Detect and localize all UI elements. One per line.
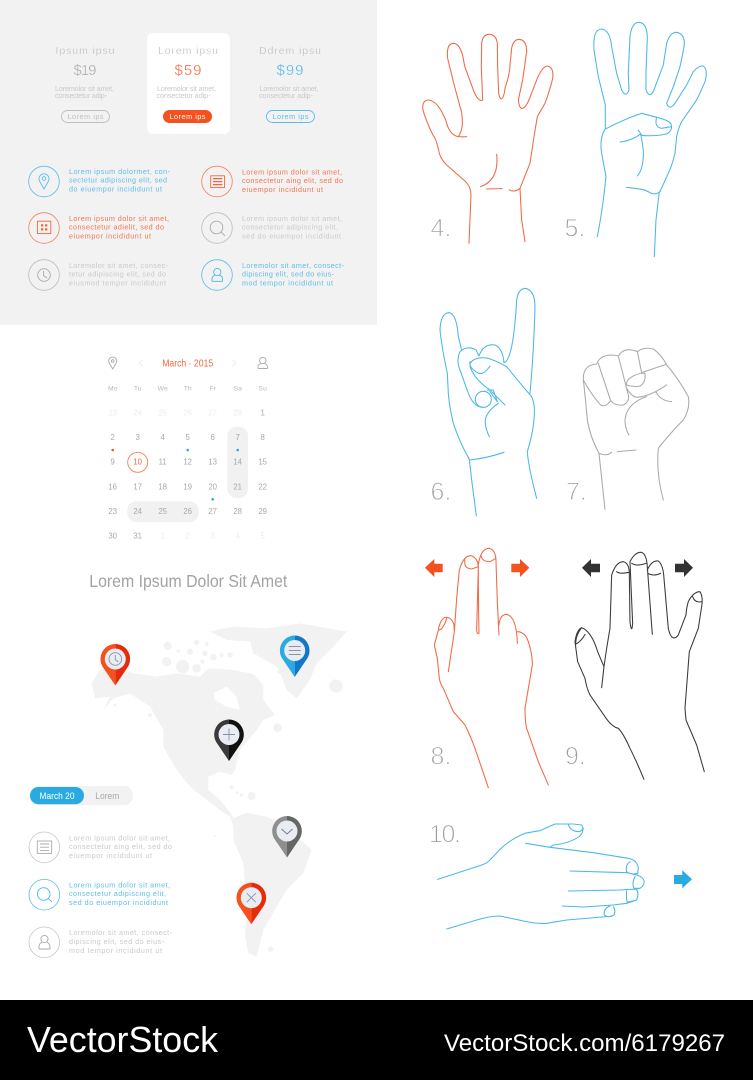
hand 5: four fingers <box>594 22 706 257</box>
list item: user: mod tempor incididunt ut <box>69 946 162 955</box>
calendar days: 4 <box>161 433 166 442</box>
calendar days: 12 <box>183 458 192 467</box>
calendar header <box>109 357 268 370</box>
hand 6: rock sign <box>440 288 537 516</box>
calendar weekday labels: Su <box>259 386 267 392</box>
calendar days: 19 <box>183 482 192 491</box>
calendar days: 30 <box>108 532 118 541</box>
hand 8: two fingers spread <box>434 548 548 788</box>
feature: list: consectetur aing elit, sed do <box>242 176 343 185</box>
list item: search: sed do eiuempor incididunt <box>69 898 168 907</box>
calendar days: 17 <box>133 482 142 491</box>
calendar days: 5 <box>186 433 191 442</box>
arrow: blue right <box>674 870 692 888</box>
number 7: 7. <box>566 478 587 506</box>
feature: clock: tetur adipiscing elit, sed do <box>69 270 166 279</box>
map heading: Lorem Ipsum Dolor Sit Amet <box>89 571 287 591</box>
list item: document: Lorem ipsum dolor sit amet, <box>69 834 170 842</box>
feature: grid: eiuempor incididunt ut <box>69 231 151 240</box>
pricing plan: Lorem ipsu (highlighted card): Lorem ips <box>170 112 206 121</box>
feature: list: Lorem ipsum dolor sit amet, <box>242 168 342 176</box>
pricing plan: Ipsum ipsu: Loremolor sit amet, <box>55 84 114 93</box>
feature: user: dipiscing elit, sed do eius- <box>242 270 335 279</box>
pricing plan: Ddrem ipsu: consectetur adip- <box>259 91 314 100</box>
number 4: 4. <box>430 215 451 243</box>
calendar days: 24 <box>133 507 143 516</box>
calendar days: 25 <box>158 408 168 417</box>
feature: location: sectetur adipiscing elit, sed <box>69 176 167 185</box>
calendar days: 26 <box>183 507 192 516</box>
feature: search: Lorem ipsum dolor sit amet, <box>242 214 342 223</box>
calendar days: 16 <box>108 482 117 491</box>
feature: user <box>202 260 345 290</box>
list item: document: eiuempor incididunt ut <box>69 851 152 860</box>
calendar days: 6 <box>211 433 215 442</box>
number 10: 10. <box>429 821 461 849</box>
pricing plan: Ipsum ipsu: $19 <box>74 62 96 79</box>
footer URL: VectorStock.com/6179267 <box>444 1030 725 1057</box>
map pin: chevron <box>272 816 302 858</box>
list item: document: consectetur aing elit, sed do <box>69 842 172 851</box>
hand 4: open palm <box>423 34 553 243</box>
calendar days: 18 <box>158 482 167 491</box>
calendar days: 22 <box>258 482 267 491</box>
calendar days: 20 <box>208 482 218 491</box>
map of the Americas <box>92 623 347 957</box>
calendar days: 27 <box>208 408 217 417</box>
feature: location <box>29 166 171 197</box>
pricing plan: Lorem ipsu (highlighted card): consectetur adip- <box>156 91 211 100</box>
number 5: 5. <box>564 215 585 243</box>
calendar days: 24 <box>133 408 143 417</box>
calendar days: 2 <box>186 532 190 541</box>
map pin: plus <box>214 720 244 761</box>
calendar days: 27 <box>208 507 217 516</box>
calendar days: 29 <box>258 507 267 516</box>
calendar weekday labels: Th <box>184 386 192 392</box>
map pin: close <box>236 883 266 924</box>
hand 9: four fingers spread <box>575 552 704 779</box>
feature: search <box>202 213 342 243</box>
hand 10: sideways swipe <box>438 824 644 929</box>
calendar days: 5 <box>261 532 266 541</box>
feature: grid <box>29 213 169 243</box>
pricing plan: Lorem ipsu (highlighted card): Loremolor sit amet, <box>157 84 216 93</box>
feature: list: eiuempor incididunt ut <box>242 185 323 194</box>
feature: user: Loremolor sit amet, consect- <box>242 261 345 270</box>
calendar days: 21 <box>233 482 242 491</box>
date toggle: March 20 <box>40 791 74 802</box>
calendar days: 14 <box>233 458 243 467</box>
calendar weekday labels: Sa <box>234 386 242 392</box>
list item: user <box>29 927 173 958</box>
pricing plan: Ipsum ipsu <box>55 45 115 122</box>
list item: search <box>29 879 170 910</box>
calendar days: 8 <box>261 433 265 442</box>
feature: clock <box>29 260 169 290</box>
pricing plan: Ipsum ipsu: Ipsum ipsu <box>56 45 115 57</box>
footer logo: VectorStock <box>27 1019 219 1060</box>
number 6: 6. <box>430 478 451 506</box>
calendar days <box>108 408 268 541</box>
map pin: clock <box>100 644 130 686</box>
calendar days: 26 <box>183 408 192 417</box>
arrow: orange right <box>511 559 529 577</box>
calendar days: 28 <box>233 408 242 417</box>
panel: pricing and features <box>0 0 377 325</box>
pricing plan: Lorem ipsu (highlighted card): Lorem ipsu <box>158 45 218 57</box>
arrow: dark right <box>675 559 693 577</box>
calendar weekday labels: We <box>158 386 168 392</box>
arrow: dark left <box>582 559 600 577</box>
calendar days: 10 <box>133 458 143 467</box>
list item: document <box>29 832 172 863</box>
map pin: menu <box>280 636 310 677</box>
list item: search: consectetur adipiscing elit, <box>69 889 166 898</box>
calendar days: 23 <box>108 507 117 516</box>
feature: grid: consectetur adielit, sed do <box>69 223 164 232</box>
calendar days: 31 <box>133 532 142 541</box>
calendar days: 7 <box>236 433 240 442</box>
list item: search: Lorem ipsum dolor sit amet, <box>69 880 170 890</box>
calendar days: 1 <box>161 532 165 541</box>
calendar days: 2 <box>111 433 115 442</box>
calendar days: 3 <box>136 433 140 442</box>
calendar weekday labels <box>108 386 267 392</box>
feature: clock: eiusmod tempor incididunt <box>69 278 166 287</box>
footer band <box>0 1000 753 1080</box>
calendar weekday labels: Mo <box>108 386 118 392</box>
feature: search: consectetur adipiscing elit, <box>242 223 338 232</box>
feature: list <box>202 166 343 197</box>
arrow: orange left <box>425 559 443 577</box>
feature: search: sed do eiuempor incididunt <box>242 231 341 240</box>
pricing plan: Ddrem ipsu <box>259 45 321 122</box>
pricing plan: Ddrem ipsu: $99 <box>276 62 304 79</box>
pricing plan: Ddrem ipsu: Ddrem ipsu <box>259 45 321 57</box>
number 8: 8. <box>430 742 451 770</box>
list item: user: Loremolor sit amet, consect- <box>69 928 173 937</box>
list item: user: dipiscing elit, sed do eius- <box>69 937 165 946</box>
calendar days: 3 <box>211 532 215 541</box>
calendar days: 13 <box>208 458 217 467</box>
hand 7: fist <box>583 348 689 509</box>
pricing plan: Ipsum ipsu: consectetur adip- <box>55 91 108 100</box>
pricing plan: Lorem ipsu (highlighted card): $59 <box>174 62 202 79</box>
date toggle <box>29 786 133 805</box>
calendar days: 23 <box>108 408 117 417</box>
calendar days: 11 <box>159 458 167 467</box>
calendar days: 28 <box>233 507 242 516</box>
feature: location: Lorem ipsum dolormet, con- <box>69 167 171 176</box>
calendar days: 1 <box>261 408 265 417</box>
feature: clock: Loremolor sit amet, consec- <box>69 261 169 270</box>
calendar days: 15 <box>258 458 268 467</box>
calendar header: March · 2015 <box>162 358 213 370</box>
number 9: 9. <box>565 742 586 770</box>
calendar weekday labels: Tu <box>134 386 142 392</box>
calendar days: 25 <box>158 507 168 516</box>
date toggle: Lorem <box>95 791 119 802</box>
pricing plan: Ddrem ipsu: Loremolor sit amet, <box>260 84 318 93</box>
calendar <box>108 357 268 541</box>
pricing plan: Ddrem ipsu: Lorem ips <box>272 112 309 121</box>
calendar days: 9 <box>111 458 115 467</box>
calendar days: 4 <box>236 532 241 541</box>
calendar weekday labels: Fr <box>209 386 217 392</box>
pricing plan: Ipsum ipsu: Lorem ips <box>68 112 104 121</box>
feature: location: do eiuempor incididunt ut <box>69 184 162 193</box>
feature: grid: Lorem ipsum dolor sit amet, <box>69 214 169 223</box>
pricing plan: Lorem ipsu (highlighted card) <box>147 33 230 134</box>
feature: user: mod tempor incididunt ut <box>242 278 333 287</box>
